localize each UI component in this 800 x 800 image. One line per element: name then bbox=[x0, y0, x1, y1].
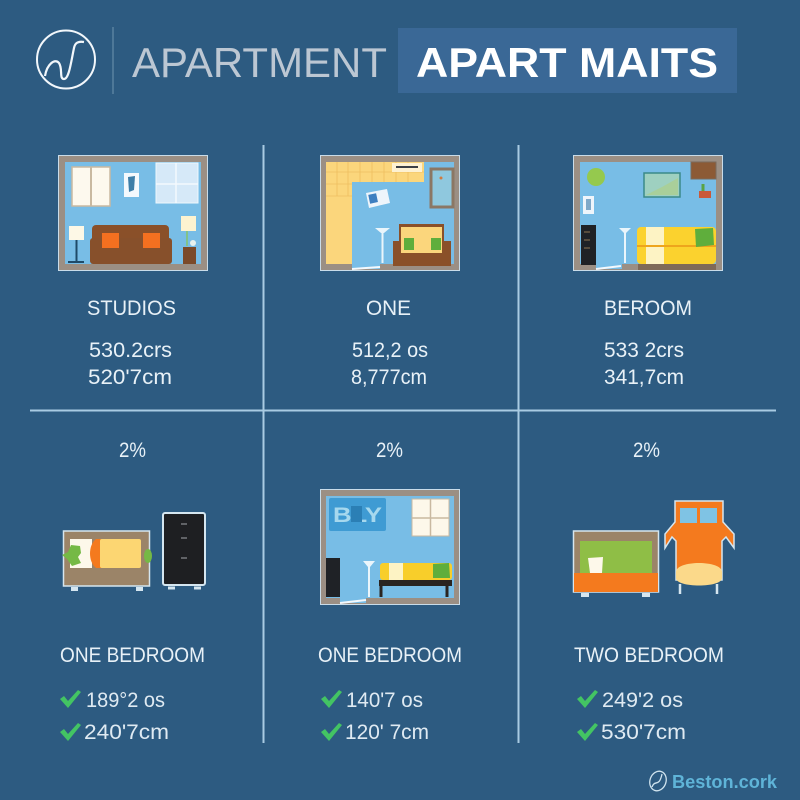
checklist: right: 530'7cm bbox=[601, 721, 686, 744]
checklist: left: 240'7cm bbox=[84, 721, 169, 744]
label: beroom: BEROOM bbox=[604, 297, 692, 320]
icon: studio living room bbox=[58, 156, 208, 270]
size figures: beroom bbox=[604, 339, 684, 389]
checklist: centre: 140'7 os bbox=[346, 689, 423, 712]
icon: bed and cabinet bbox=[62, 513, 205, 589]
title: apartment: APARTMENT bbox=[132, 39, 387, 86]
label: two bedroom: TWO BEDROOM bbox=[574, 644, 724, 667]
footer brand bbox=[647, 769, 778, 793]
panel: two bedroom bbox=[574, 439, 734, 744]
label: studios: STUDIOS bbox=[87, 297, 176, 320]
label: one bedroom centre: ONE BEDROOM bbox=[318, 644, 462, 667]
percent: right: 2% bbox=[633, 439, 660, 462]
header bbox=[37, 28, 737, 93]
title banner bbox=[398, 28, 737, 93]
label: one: ONE bbox=[366, 297, 411, 320]
size figures: one bbox=[351, 339, 428, 389]
percent: centre: 2% bbox=[376, 439, 403, 462]
icon: room with sign bbox=[320, 490, 460, 604]
grid lines bbox=[30, 145, 776, 743]
size figures: one: 512,2 os bbox=[352, 339, 428, 362]
label: one bedroom left: ONE BEDROOM bbox=[60, 644, 205, 667]
checklist: left bbox=[60, 689, 169, 744]
panel: studios bbox=[58, 156, 208, 389]
panel: one bedroom centre bbox=[318, 439, 462, 744]
icon: logo bbox=[37, 30, 95, 88]
icon: brand logo bbox=[647, 769, 669, 793]
size figures: one: 8,777cm bbox=[351, 366, 427, 389]
icon: one-room plan bbox=[320, 156, 460, 270]
size figures: studios bbox=[88, 339, 172, 389]
checklist: left: 189°2 os bbox=[86, 689, 165, 712]
percent: left: 2% bbox=[119, 439, 146, 462]
panel: one bedroom left bbox=[60, 439, 205, 744]
icon: bed and armchair bbox=[574, 501, 734, 595]
checklist: centre bbox=[321, 689, 429, 744]
icon: room with sign: BLY bbox=[333, 504, 382, 527]
panel: beroom bbox=[574, 156, 722, 389]
checklist: right: 249'2 os bbox=[602, 689, 683, 712]
size figures: beroom: 341,7cm bbox=[604, 366, 684, 389]
footer brand: Beston.cork bbox=[672, 772, 778, 792]
panel: one bbox=[320, 156, 460, 389]
checklist: centre: 120' 7cm bbox=[345, 721, 429, 744]
size figures: studios: 520'7cm bbox=[88, 366, 172, 389]
size figures: beroom: 533 2crs bbox=[604, 339, 684, 362]
size figures: studios: 530.2crs bbox=[89, 339, 172, 362]
icon: bedroom plan bbox=[574, 156, 722, 270]
title banner: APART MAITS bbox=[416, 39, 718, 86]
checklist: right bbox=[577, 689, 686, 744]
